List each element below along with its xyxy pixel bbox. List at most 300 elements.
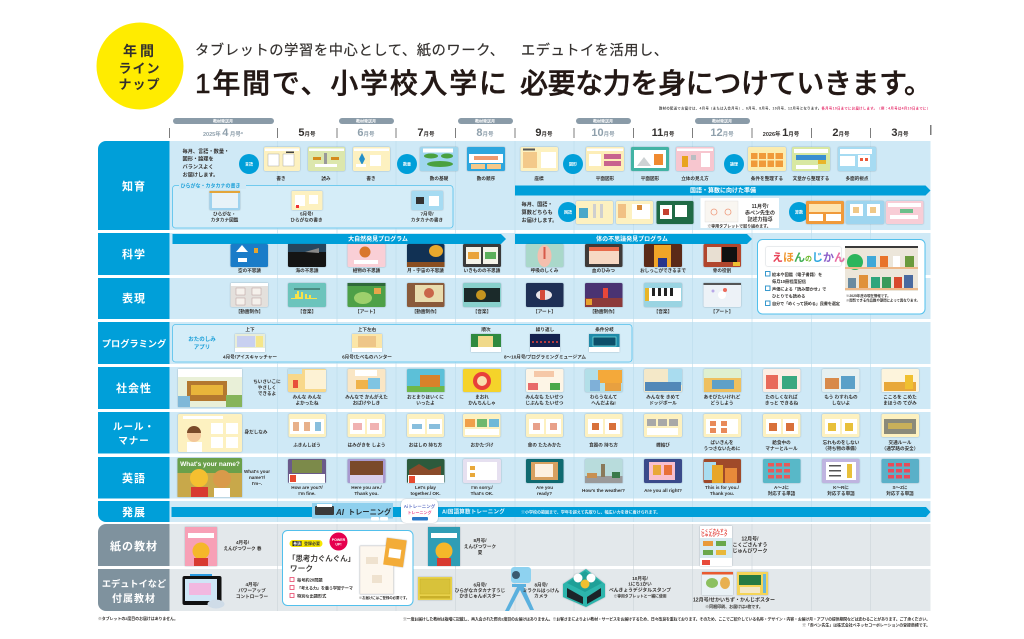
thumbnail: 音楽 3 [644,283,682,307]
text: おたのしみアプリ: おたのしみ [188,335,216,343]
month headers: 5月号 [298,127,316,139]
rule captions: （通学路の安全） [882,445,918,452]
text: 毎月、国語・算数どちらも: 毎月、国語・ [522,200,553,208]
logo: えほんのじかん: えほんのじかん [772,251,845,264]
caption: じぶんも たいせつ [525,400,564,406]
caption: 【動画制作】 [412,308,439,315]
month headers: 10月号 [591,127,615,139]
rule captions: 交通ルール [889,439,912,446]
thumbnail: 7月号 カタカナの書き [412,191,443,210]
caption [824,394,858,406]
caption: 12月号/ [742,536,759,542]
caption: 身だしなみ [245,428,268,436]
thumbnail: 平面図形 [586,147,624,171]
book: こくごさんすうじゅんびワーク: じゅんびワーク [701,532,728,537]
english captions: How are you?/ [291,485,323,490]
title: main heading [195,68,932,99]
thumbnail: 座標 [520,147,558,171]
caption: 条件を整理する [751,175,783,182]
caption: ドッジボール [649,400,677,406]
shipping month pill labels [213,118,732,124]
panel: 知育 intro text: バランスよく [182,164,214,170]
panel: 知育 intro text [182,147,229,178]
poster: せかいちず [702,572,733,595]
badge: 年間ラインナップ: ライン [118,61,161,76]
caption [464,538,496,555]
caption [704,394,741,406]
english captions: K～Rに [833,485,849,490]
book: こくごさんすうじゅんびワーク: こくごさんすう [701,528,728,533]
caption: まほうの てがみ [883,400,917,406]
english captions: A～Jに [774,485,789,490]
caption [223,326,277,360]
caption: 10月号/ [632,576,649,582]
panel: おたのしみアプリ [172,324,632,362]
caption [693,596,775,609]
thumbnail: 国語 3 [656,201,694,224]
card: AI国語算数トレーニング [401,499,438,523]
caption: たのしくなれば [765,394,798,400]
month headers: 3月号 [891,127,909,139]
caption [236,582,268,600]
english captions: ready? [537,491,552,496]
thumbnail: おばけやしき [348,369,386,392]
thumbnail: 書き [353,147,390,171]
thumbnail: ひらがな・カタカナ図鑑 [210,191,240,210]
icon: 数量 [397,154,417,174]
english captions: Thank you. [354,491,379,496]
icon: 算数: 算数 [795,208,803,214]
thumbnail: 繰り返し [530,334,560,352]
thumbnail: 空の不思議 [230,244,268,267]
thumbnail: 平面図形 [631,147,669,171]
heading: 「思考力ぐんぐん」 [288,553,355,563]
badge: 年間ラインナップ: ナップ [118,77,161,92]
caption: ちいさいこに [253,378,281,385]
caption: みんな みんな [293,394,322,400]
caption [590,394,618,406]
rule captions: マナーとルール [765,446,798,452]
list: features: 「考える力」を養う学習テーマ [297,584,353,592]
badge: 巻頭 登録必要: 登録必要 [304,540,320,546]
caption [223,540,262,552]
thumbnail: 5月号 ひらがなの書き [292,191,322,210]
thumbnail: アート 1 [348,283,386,307]
caption: 書き [366,175,376,182]
panel: 11月号 赤ペン先生の記述力指導: 赤ペン先生の [745,210,775,216]
caption [253,378,281,396]
device: デジタルスタンプ [563,569,605,607]
caption: 多面的視点 [846,175,869,182]
month headers: 6月号 [357,127,375,139]
caption: 【動画制作】 [236,308,263,315]
heading: ワーク [290,564,313,573]
badge: 巻頭 登録必要 [290,540,322,547]
caption: 12月号/せかいちず・かんじポスター [693,596,775,604]
text: おたのしみアプリ [188,335,216,351]
caption [407,394,444,406]
shipping month pill labels: 教材発送月 [213,118,233,124]
thumbnail: 読み [308,147,345,171]
text: 毎月、国語・算数どちらも: お届けします。 [522,217,557,224]
arrow: 体の不思議発見プログラム: 体の不思議発見プログラム [596,235,668,243]
book: えんぴつワーク 夏 [428,527,460,566]
row label: ルール・マナー: ルール・ [113,422,155,433]
caption: 座標 [534,175,544,182]
rule captions: 忘れものをしない [823,439,860,446]
rule captions: 給食中の [772,439,791,446]
thumbnail: みんなを きめて ドッジボール [644,369,682,392]
english captions: This is for you./ [705,485,740,490]
caption: カタカナの書き [411,216,443,224]
screenshot: えほんのじかん [845,246,918,291]
caption [883,394,917,406]
english captions: 対応する単語 [827,490,855,497]
row label: プログラミング: プログラミング [102,338,166,349]
arrow: 大自然発見プログラム [172,234,506,244]
thumbnail: 身だしなみ [178,414,242,452]
caption: 条件分岐 [595,326,614,333]
caption: まおれ [475,394,489,400]
thumbnail: おとまりほいくに いったよ [407,369,444,392]
caption: 4月号/ [245,582,259,588]
caption: コントローラー [236,594,268,600]
caption: ミラクルはっけん [523,587,560,594]
month headers [203,127,909,139]
thumbnail: 血のひみつ [585,244,622,267]
list: えほんのじかん features: ひとりでも読める [772,292,805,300]
thumbnail: もう わすれものしないよ [822,369,860,392]
thumbnail: 算数 2 [846,201,884,224]
thumbnail: 動画制作 1 [230,283,268,307]
thumbnail: 音楽 2 [463,283,501,307]
panel: 11月号 赤ペン先生の記述力指導: 記述力指導 [747,216,773,223]
thumbnail: いきものの不思議 [463,244,501,267]
book pages [360,538,407,594]
caption: ※同梱印刷、お届けは2枚です。 [705,603,763,609]
logo: AIトレーニング: トレーニング [348,508,392,516]
month headers: 9月号 [535,127,553,139]
icon: 国語: 国語 [564,208,572,214]
rule captions: 蝶結び [656,442,670,448]
rule captions [293,439,918,452]
badge: POWER UP: POWER [332,538,346,542]
caption [293,394,322,406]
row label: 科学: 科学 [122,247,146,261]
caption: よかったね [296,400,319,406]
icon: 論理: 論理 [730,160,738,166]
caption: ※専用タブレットと一緒に使用 [613,594,667,598]
caption [525,394,564,406]
panel: ひらがな・カタカナの書き [172,182,453,228]
thumbnail: 順次 [471,334,501,352]
thumbnail: 動画制作 3 [585,283,622,307]
row backgrounds [169,141,930,611]
thumbnail: 立体の見え方 [676,147,714,171]
caption: ひらがな・ [213,210,236,218]
caption: name?/ [249,475,266,480]
caption: 【音楽】 [654,308,672,315]
caption: 8～10月号/プログラミングミュージアム [504,354,586,360]
list: えほんのじかん features: 自分で「めくって読める」良書を選定 [772,300,841,307]
row label: 紙の教材: 紙の教材 [110,539,158,553]
poster: かんじポスター [737,572,768,595]
panel: 知育 intro text: 図形・論理を [182,154,214,162]
row label: ルール・マナー: マナー [118,436,150,447]
arrow: AI国語算数トレーニング: AI国語算数トレーニング [442,508,505,516]
caption: カタカナ図鑑 [211,216,239,224]
poster: ひらがなカタカナすうじかきじゅんポスター [418,577,452,600]
icon: 数量: 数量 [403,160,411,166]
caption: 8月号/ [473,538,487,544]
shipping month pill labels: 教材発送月 [475,118,495,124]
caption: パワーアップ [238,587,266,594]
caption: 骨の役割 [713,267,732,274]
caption: もう わすれもの [824,394,858,400]
thumbnail: 呼吸のしくみ [526,244,564,267]
thumbnail: こころを こめた まほうの てがみ [882,369,919,392]
card: AI国語算数トレーニング: トレーニング [408,509,432,515]
caption: 【音楽】 [298,308,316,315]
english captions: How's the weather? [582,488,625,493]
footnote: right: ※一度お届けした教材は複増に記載し、再入会された際の2度目のお届けはありません。※お客さまによりよい教材・サービスをお届けするため、日々改良を重ねております。そのため、ここでご紹介している名称・デザイン・内容・お届け月・アプリの提供期間などは変わることがあります。ご了承ください。 [403,616,930,622]
thumbnail: 多面的視点 [838,147,876,171]
note: ※2025年度の現在情報です。 [846,293,890,298]
english captions: 対応する単語 [768,490,796,497]
title: lead line: エデュトイを活用し、 [521,42,668,59]
caption: みんなで かんがえた [345,394,388,400]
thumbnail: 数の基礎 [420,147,458,171]
text: おたのしみアプリ: アプリ [194,344,210,351]
caption: しないよ [832,400,851,406]
rule captions: （持ち物の準備） [823,445,859,452]
caption: 読み [321,175,331,182]
caption: 【アート】 [355,309,378,315]
month ticks [169,125,932,138]
book: えんぴつワーク 春 [185,527,217,566]
row label: エデュトイなど付属教材 [98,569,170,611]
panel: 11月号 赤ペン先生の記述力指導: 11月号/ [752,203,769,210]
thumbnail: 音楽 1 [288,283,326,307]
thumbnail: 国語 2 [616,201,653,224]
caption: おしっこができるまで [640,267,686,274]
caption: おとまりほいくに [407,394,444,400]
caption: ひらがなの書き [290,216,323,224]
caption: 植物の不思議 [353,267,381,274]
caption [765,394,798,406]
badge: 巻頭 登録必要: 巻頭 [293,541,301,546]
thumbnail: 算数 1 [806,201,844,224]
english thumbnails [288,459,919,483]
text: 毎月、国語・算数どちらも [522,200,557,224]
list: えほんのじかん features [766,271,841,307]
caption: かきじゅんポスター [459,592,501,600]
list: features [290,576,353,600]
caption: 空の不思議 [238,267,261,274]
thumbnail: アート 3 [704,283,741,307]
thumbnail: みんなも たいせつ [526,369,564,392]
heading [288,553,355,573]
title: lead line [195,42,668,59]
caption: 数の基礎 [430,175,449,182]
row label: 英語: 英語 [122,471,146,485]
caption [290,212,323,224]
logo: えほんのじかん [766,247,845,266]
english captions: I'm fine. [298,491,316,496]
caption: 【アート】 [711,309,733,315]
thumbnail: 国語 1 [576,201,613,224]
caption: I'm~. [252,481,262,486]
panel: 11月号 赤ペン先生の記述力指導 [700,198,779,228]
badge: POWER UP [330,532,348,550]
row label: 科学 [98,233,170,275]
caption: 【アート】 [533,309,556,315]
row label: ルール・マナー [98,412,170,454]
thumbnail: 月・宇宙の不思議 [407,244,444,267]
list: えほんのじかん features: 毎月10冊程度配信 [772,278,807,285]
thumbnail: 条件を整理する [748,147,786,171]
caption: 呼吸のしくみ [531,267,559,274]
thumbnail: アート 2 [526,283,564,307]
caption: 血のひみつ [592,267,615,274]
caption: 1にち1かい [628,580,652,588]
thumbnail: 文章から整理する [792,147,830,171]
row label: 発展: 発展 [122,505,146,519]
panel: 知育 intro text: 毎月、言語・数量・ [182,147,229,155]
caption: 4月号/ [236,540,250,546]
english captions: S～Zに [892,485,908,490]
thumbnail: 書き [264,147,300,171]
caption [646,394,680,406]
english captions [291,485,914,497]
title: main heading: 必要な力を身につけていきます。 [520,68,932,99]
device: タブレットとコントローラー [182,574,224,608]
thumbnail: What's your name? [178,458,242,497]
caption: やさしく [258,384,276,391]
caption: 上下左右 [358,326,377,333]
caption: おばけやしき [353,400,380,406]
row label: 社会性: 社会性 [116,381,152,395]
arrow: 国語・算数に向けた準備 [515,186,930,196]
icon: 図形: 図形 [569,160,577,166]
thumbnail: まおれ かんちんしゃ [463,369,501,392]
english captions: together./ OK. [410,491,441,496]
rule captions: おかたづけ [471,442,494,448]
english captions: Are you all right? [644,488,682,493]
english captions: Here you are./ [351,485,382,490]
caption: きっと できるね [765,400,798,406]
thumbnail: What's your name?: What's your name? [180,461,240,468]
delivery note: 教材の配送でお届けは、4月号（または入会月号）、6月号、8月号、10月号、12月号となります。各月号10日までにお届けします。（例：4月号は4月10日までに） [659,106,930,110]
thumbnail: みんな みんな よかったね [288,369,326,392]
month headers: 2月号 [832,127,850,139]
panel: 11月号 赤ペン先生の記述力指導: ※専用タブレットで取り組めます。 [707,222,771,228]
text: 毎月、国語・算数どちらも: 算数どちらも [522,208,553,216]
row label: 社会性 [98,367,170,409]
caption: えんぴつワーク [464,543,496,550]
row label: 表現: 表現 [122,291,146,305]
caption: かんちんしゃ [468,400,496,406]
panel: 思考力ぐんぐんワーク [282,530,413,606]
caption: ひらがなカタカナすうじ [455,587,506,594]
arrow: AI国語算数トレーニング: ※小学校の範囲まで、学年を超えて先取りし、幅広い力を身に着けられます。 [521,508,660,514]
arrow: AI国語算数トレーニング [172,507,930,517]
rule thumbnails [288,414,919,437]
row label: 発展 [98,501,170,522]
logo: AIトレーニング [312,503,393,520]
title: lead line: タブレットの学習を中心として、紙のワーク、 [195,42,504,59]
caption: 海の不思議 [296,267,319,274]
caption: 6月号/ [473,582,487,588]
list: えほんのじかん features: 声優による「読み聞かせ」で [772,286,826,292]
month headers: 11月号 [652,127,675,139]
caption: 夏 [478,550,483,555]
arrow: 国語・算数に向けた準備: 国語・算数に向けた準備 [690,186,756,194]
caption [244,469,270,486]
caption: 4月号/アイスキャッチャー [223,354,277,360]
rule captions: ふきんしぼう [293,442,321,448]
english captions: Thank you. [710,491,734,496]
thumbnail: わらうなんて へんだよね [585,369,622,392]
month headers: 2025年 4 月号* [203,127,244,139]
shipping month pills [173,118,750,124]
footnote: right [403,616,930,628]
rule captions: おはしの 持ち方 [409,442,443,448]
caption: 立体の見え方 [681,175,709,182]
caption: 数の順序 [477,175,496,182]
caption: 6月号/たべものハンター [342,354,392,360]
english captions: That's OK. [471,491,493,496]
month headers: 7月号 [417,127,435,139]
caption: 月・宇宙の不思議 [407,267,444,274]
rule captions: 傘の たたみかた [528,442,562,448]
title: main heading: 1年間で、小学校入学に [195,68,507,99]
thumbnail: おしっこができるまで [644,244,682,267]
caption [609,576,671,598]
caption: いったよ [416,400,435,406]
caption [342,326,392,360]
english captions: Let's play [415,485,436,490]
caption: 5月号/ [300,212,314,218]
caption: いきものの不思議 [464,267,501,274]
caption: 書き [276,175,286,182]
thumbnail: たべものハンター [352,334,382,352]
row label: エデュトイなど付属教材: 付属教材 [112,592,156,605]
icon: 言語: 言語 [245,160,253,166]
caption: どうしよう [711,400,733,406]
list: えほんのじかん features: 絵本や図鑑（電子書籍）を [772,271,822,278]
arrow: 体の不思議発見プログラム [515,234,752,244]
caption [468,394,496,406]
caption: へんだよね! [591,400,616,406]
footnote: right: ※「赤ペン先生」は株式会社ベネッセコーポレーションの登録商標です。 [802,622,930,628]
thumbnail: 数の順序 [467,147,505,171]
logo: AIトレーニング: AI [335,508,345,517]
thumbnail: あそびたいけれど どうしよう [704,369,741,392]
thumbnail: 植物の不思議 [348,244,386,267]
rule captions: 食器の 持ち方 [589,442,618,448]
row label: 英語 [98,457,170,498]
row label: 紙の教材 [98,524,170,566]
shipping month pill labels: 教材発送月 [356,118,376,124]
caption: 平面図形 [596,175,615,182]
caption: みんなを きめて [646,394,680,400]
caption: こころを こめた [883,394,917,400]
note: ※お届けにはご登録の必要です。 [359,595,409,600]
rule captions: はみがきを しよう [347,442,386,448]
caption [411,212,443,224]
thumbnail: 条件分岐 [589,334,620,352]
